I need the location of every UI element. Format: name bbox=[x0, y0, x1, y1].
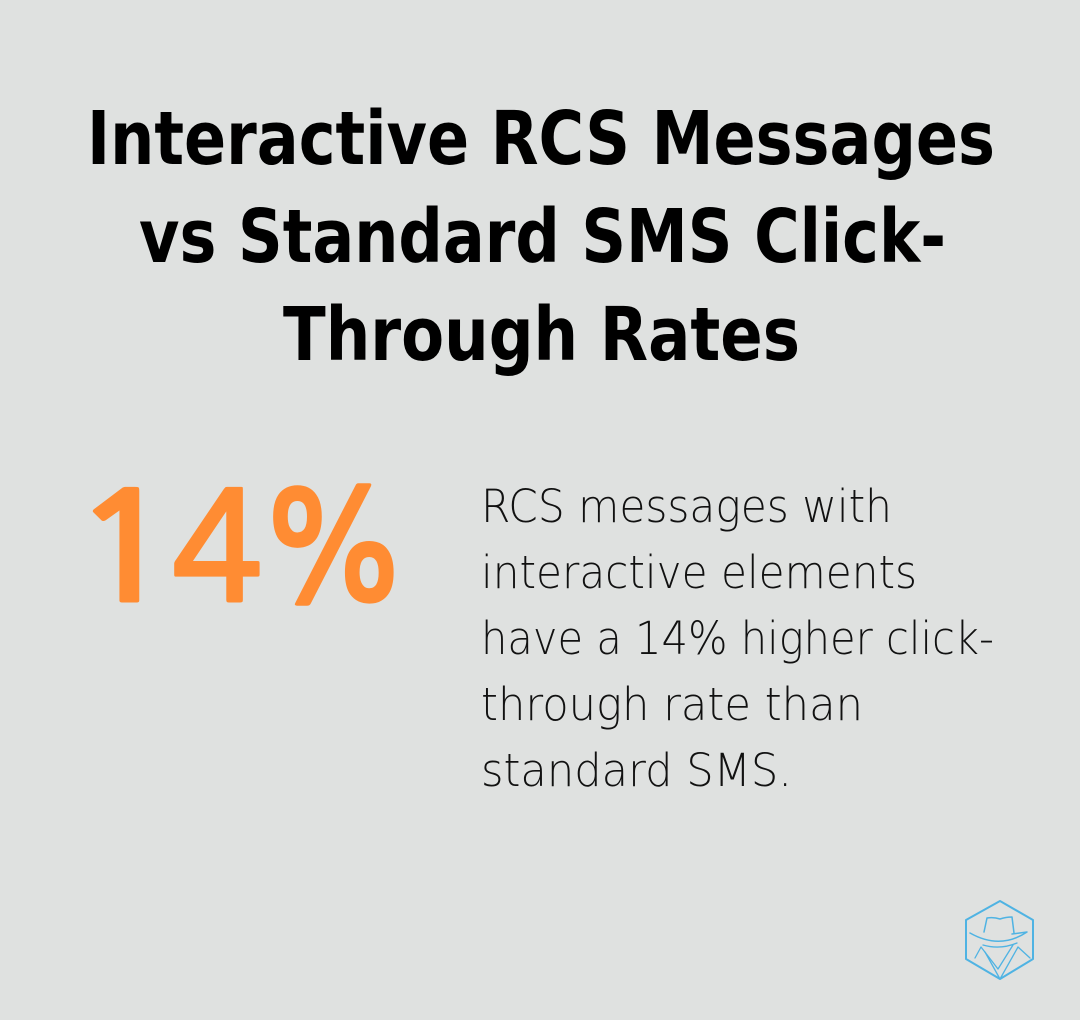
statistic: 14%: 1 bbox=[69, 475, 181, 625]
description text: through rate than bbox=[481, 678, 863, 731]
hexagon outline bbox=[966, 901, 1033, 979]
icon: hexagon logo with hat and coat bbox=[966, 901, 1033, 979]
description text: RCS messages with bbox=[481, 480, 892, 533]
coat collar right bbox=[985, 947, 1030, 979]
hat crown bbox=[984, 917, 1014, 933]
title bbox=[87, 96, 995, 378]
hat brim bbox=[970, 932, 1027, 941]
description text bbox=[481, 480, 994, 797]
hat band shadow bbox=[983, 943, 1017, 947]
statistic: 14%: % bbox=[258, 475, 410, 626]
description text: interactive elements bbox=[481, 546, 917, 599]
statistic: 14% bbox=[69, 474, 410, 626]
statistic: 14%: 4 bbox=[170, 474, 264, 625]
coat collar left bbox=[975, 945, 1013, 969]
description text: have a 14% higher click- bbox=[481, 612, 994, 665]
description text: standard SMS. bbox=[481, 744, 792, 797]
title: vs Standard SMS Click- bbox=[139, 194, 946, 280]
title: Through Rates bbox=[283, 292, 800, 378]
